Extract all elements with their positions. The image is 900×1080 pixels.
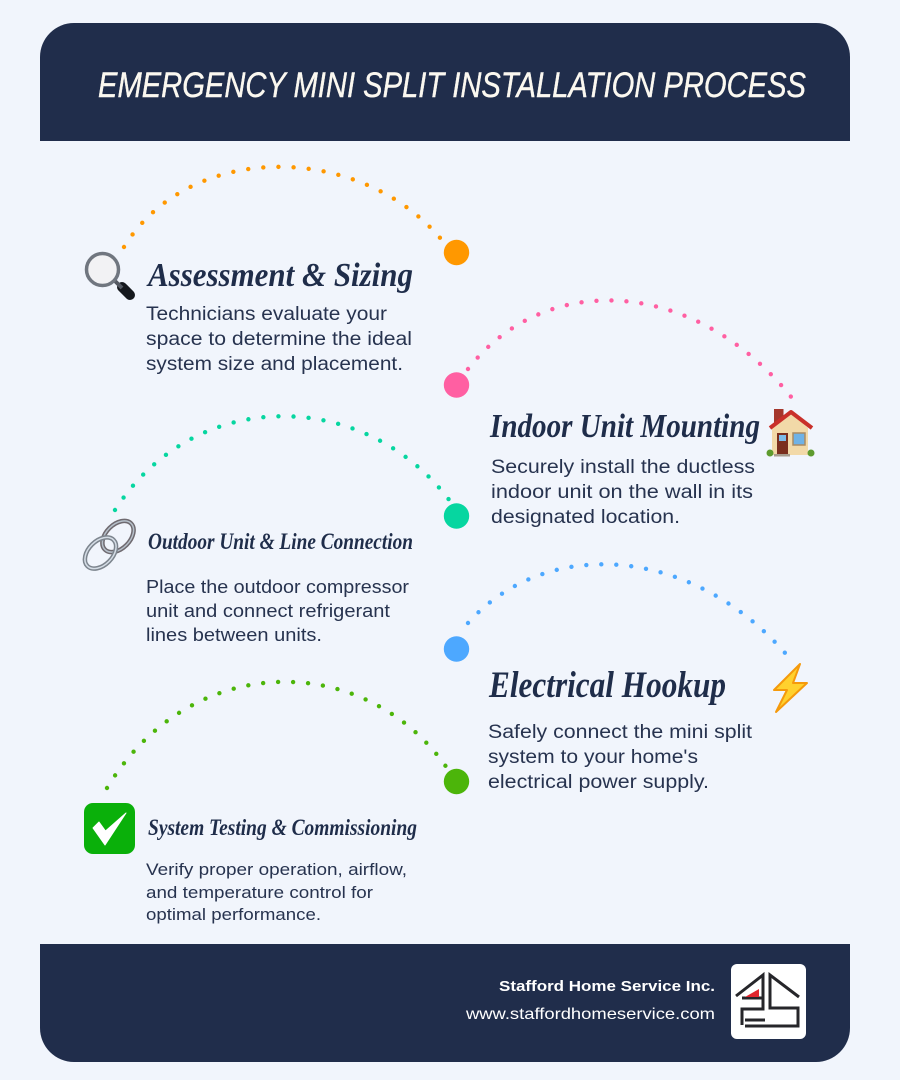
marker: green (444, 769, 469, 794)
icon: magnifying glass (86, 254, 130, 295)
description (146, 860, 407, 924)
icon: lightning bolt (774, 664, 807, 712)
description (146, 304, 412, 375)
description (146, 577, 409, 645)
description: lines between units. (146, 625, 322, 645)
marker: orange (444, 240, 469, 265)
heading: Indoor Unit Mounting (489, 408, 760, 445)
description: electrical power supply. (488, 772, 709, 793)
step 5: system testing and commissioning (84, 682, 469, 924)
dotted arc: green (107, 682, 447, 788)
description (488, 722, 753, 793)
step 1: assessment and sizing (86, 167, 469, 375)
description: and temperature control for (146, 883, 373, 902)
description: Technicians evaluate your (146, 304, 388, 325)
step 2: indoor unit mounting (444, 300, 814, 528)
description: unit and connect refrigerant (146, 601, 390, 621)
description: Safely connect the mini split (488, 722, 753, 743)
marker: blue (444, 636, 469, 662)
step 3: outdoor unit and line connection (79, 416, 469, 645)
icon: green check box (84, 803, 135, 854)
dotted arc: teal (115, 416, 450, 510)
header banner (40, 23, 850, 141)
dotted arc: pink (468, 300, 792, 398)
description: space to determine the ideal (146, 329, 412, 350)
dotted arc: blue (468, 564, 786, 654)
description: Place the outdoor compressor (146, 577, 409, 597)
description: optimal performance. (146, 905, 321, 924)
website: www.staffordhomeservice.com (465, 1006, 715, 1023)
description: system to your home's (488, 747, 698, 768)
footer banner (40, 944, 850, 1062)
heading: System Testing & Commissioning (148, 815, 417, 840)
description: Verify proper operation, airflow, (146, 860, 407, 879)
company name: Stafford Home Service Inc. (499, 978, 715, 995)
description: designated location. (491, 507, 680, 528)
marker: pink (444, 372, 469, 398)
dotted arc: orange (124, 167, 441, 247)
heading: Outdoor Unit & Line Connection (148, 529, 413, 554)
marker: teal (444, 503, 469, 529)
heading: Assessment & Sizing (146, 257, 413, 294)
description: Securely install the ductless (491, 457, 755, 478)
icon: chain links (79, 515, 140, 575)
logo (731, 964, 806, 1039)
description: indoor unit on the wall in its (491, 482, 753, 503)
step 4: electrical hookup (444, 564, 807, 793)
description (491, 457, 755, 528)
heading: Electrical Hookup (488, 665, 726, 706)
icon: house (766, 409, 814, 456)
description: system size and placement. (146, 354, 403, 375)
